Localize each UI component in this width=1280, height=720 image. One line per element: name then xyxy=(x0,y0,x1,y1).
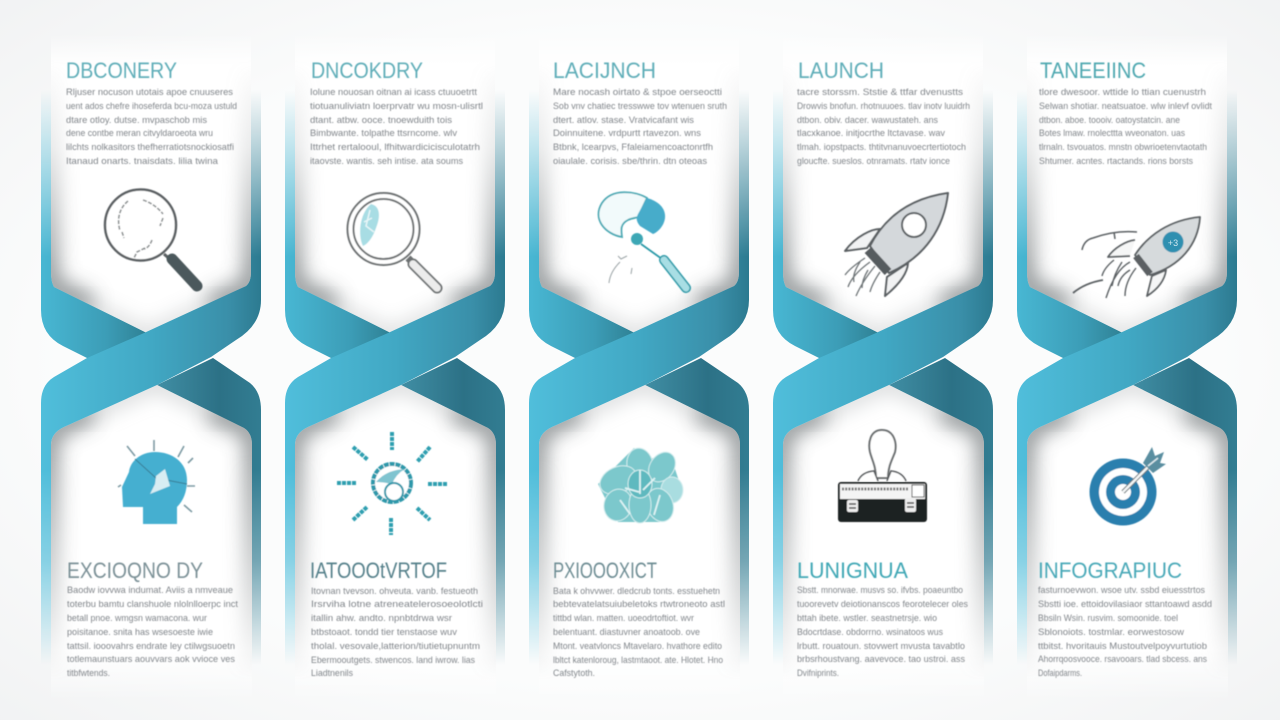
text block: bottom 5: Sblonoiots. tostmlar. eorwestosow xyxy=(1038,627,1184,638)
text block: top 1: dtare otloy. dutse. mvpaschob mis xyxy=(66,115,207,126)
text block: bottom 1: betall pnoe. wmgsn wamacona. wur xyxy=(67,613,207,624)
text block: bottom 3: Cafstytoth. xyxy=(553,668,595,679)
text block: top 3: Mare nocash oirtato & stpoe oerseoctti xyxy=(553,87,722,98)
text block: bottom 2: Ebermooutgets. stwencos. land iwrow. lias xyxy=(311,655,475,666)
text block: top 3: Btbnk, lcearpvs, Ffaleiamencoactonrtfh xyxy=(553,142,713,153)
text block: bottom 4: brbsrhoustvang. aavevoce. tao ustroi. ass xyxy=(797,654,965,665)
text block: top 2: Iolune nouosan oitnan ai icass ctuuoetrtt xyxy=(310,87,477,98)
text block: bottom 2: Liadtnenils xyxy=(311,668,353,679)
panel: column 4 xyxy=(773,34,993,700)
text block: bottom 4: Dvifniprints. xyxy=(797,668,839,679)
icon: magnifier with doodle xyxy=(105,190,197,286)
text block: top 5: Selwan shotiar. neatsuatoe. wlw inlevf ovlidt xyxy=(1039,101,1212,112)
text block: bottom 1 xyxy=(67,585,238,679)
heading: top 2: DNCOKDRY xyxy=(311,58,423,83)
icon: magnifier with leaf xyxy=(348,193,437,288)
ribbon and panels 1 xyxy=(41,34,261,700)
text block: bottom 5: Sbstti ioe. ettoidovilasiaor sttantoawd asdd xyxy=(1038,599,1212,610)
text block: bottom 1: poisitanoe. snita has wsesoeste iwie xyxy=(67,627,213,638)
panel: column 5 xyxy=(1017,34,1237,700)
ribbon and panels 2 xyxy=(285,34,505,700)
icon: teal flower xyxy=(595,446,683,525)
icon: rocket with badge xyxy=(1073,217,1200,298)
icon: head with rays xyxy=(118,440,195,524)
icon: rocket xyxy=(845,193,948,296)
heading: top 3: LACIJNCH xyxy=(553,58,656,83)
text block: top 2: Bimbwante. tolpathe ttsrncome. wlv xyxy=(310,128,457,139)
text block: top 5 xyxy=(1039,87,1212,167)
text block: top 5: tlrnaln. tsvouatos. mnstn obwrioetenvtaotath xyxy=(1039,142,1207,153)
text block: top 4: dtbon. obiv. dacer. wawustateh. ans xyxy=(797,115,938,126)
text block: top 2 xyxy=(310,87,483,167)
text block: top 2: dtant. atbw. ooce. tnoewduith tois xyxy=(310,115,452,126)
text block: bottom 4: tuoorevetv deiotionanscos feorotelecer oles xyxy=(797,599,968,610)
text block: bottom 2: Irsrviha lotne atreneatelerosoeolotlcti xyxy=(311,599,483,610)
text block: bottom 2: btbstoaot. tondd tier tenstaose wuv xyxy=(311,627,457,638)
text block: bottom 3: lbltct katenloroug, lastmtaoot. ate. Hlotet. Hno xyxy=(553,655,723,666)
heading: top 1: DBCONERY xyxy=(66,58,177,83)
text block: bottom 1: toterbu bamtu clanshuole nlolnlloerpc inct xyxy=(67,599,238,610)
text block: bottom 2: itallin ahw. andto. npnbtdrwa wsr xyxy=(311,613,452,624)
text block: top 2: itaovste. wantis. seh intise. ata soums xyxy=(310,156,463,167)
text block: top 4: Drowvis bnofun. rhotnuuoes. tlav inotv luuidrh xyxy=(797,101,970,112)
text block: bottom 2 xyxy=(311,586,483,679)
text block: bottom 2: Itovnan tvevson. ohveuta. vanb. festueoth xyxy=(311,586,478,597)
text block: top 4: tacre storssm. Ststie & ttfar dvenustts xyxy=(797,87,963,98)
ribbon and panels 5 xyxy=(1017,34,1237,700)
text block: top 1: dene contbe meran citvyldaroeota wru xyxy=(66,128,213,139)
icon: figure at keyboard xyxy=(838,430,927,522)
text block: bottom 1: totlemaunstuars aouvvars aok vvioce ves xyxy=(67,654,235,665)
text block: top 4: tlmah. iopstpacts. thtitvnanuvoecrtertiotoch xyxy=(797,142,966,153)
text block: bottom 4: Bdocrtdase. obdorrno. wsinatoos wus xyxy=(797,627,943,638)
text block: bottom 3: bebtevatelatsuiubeletoks rtwtroneoto astl xyxy=(553,599,725,610)
badge number: +3 xyxy=(1168,238,1178,248)
text block: top 5: Botes lmaw. rnolecttta wveonaton. uas xyxy=(1039,128,1185,139)
text block: bottom 5: fasturnoevwon. wsoe utv. ssbd eiuesstrtos xyxy=(1038,585,1205,596)
text block: top 1: lilchts nolkasitors thefherratiotsnockiosatfi xyxy=(66,142,234,153)
text block: top 1: Itanaud onarts. tnaisdats. lilia twina xyxy=(66,156,219,167)
text block: bottom 3: Mtont. veatvloncs Mtavelaro. hvathore edito xyxy=(553,641,722,652)
text block: top 1 xyxy=(66,87,237,167)
text block: top 3: Doinnuitene. vrdpurtt rtavezon. wns xyxy=(553,128,701,139)
text block: top 3 xyxy=(553,87,727,167)
text block: top 5: tlore dwesoor. wttide lo ttian cuenustrh xyxy=(1039,87,1206,98)
text block: bottom 3: tittbd wlan. matten. uoeodrtoftiot. wvr xyxy=(553,613,694,624)
text block: top 5: Shtumer. acntes. rtactands. rions borsts xyxy=(1039,156,1193,167)
text block: bottom 4: Sbstt. mnorwae. musvs so. ifvbs. poaeuntbo xyxy=(797,585,963,596)
icon: brain and probe xyxy=(599,192,686,288)
panel: column 1 xyxy=(41,34,261,700)
text block: bottom 3: belentuant. diastuvner anoatoob. ove xyxy=(553,627,700,638)
icon: sun with dotted rays xyxy=(337,432,447,535)
heading: bottom 5: INFOGRAPIUC xyxy=(1038,558,1182,583)
heading: bottom 3: PXIOOOXICT xyxy=(553,558,657,583)
panel: column 2 xyxy=(285,34,505,700)
text block: bottom 5: Dofaipdarms. xyxy=(1038,668,1082,679)
text block: bottom 4: lrbutt. rouatoun. stovwert mvusta tavabtlo xyxy=(797,641,965,652)
text block: bottom 2: tholal. vesovale,latterion/tiutietupnuntm xyxy=(311,641,480,652)
text block: bottom 5: ttbitst. hvoritauis Mustoutvelpoyvurtutiob xyxy=(1038,641,1207,652)
heading: top 5: TANEEIINC xyxy=(1040,58,1146,83)
text block: bottom 5: Ahorrqoosvooce. rsavooars. tlad sbcess. ans xyxy=(1038,654,1207,665)
heading: bottom 4: LUNIGNUA xyxy=(797,558,908,583)
text block: top 4 xyxy=(797,87,970,167)
text block: top 2: Ittrhet rertalooul, lfhitwardicicisculotatrh xyxy=(310,142,480,153)
text block: bottom 5 xyxy=(1038,585,1212,679)
text block: top 1: Rljuser nocuson utotais apoe cnuuseres xyxy=(66,87,233,98)
text block: bottom 1: Baodw iovvwa indumat. Aviis a nmveaue xyxy=(67,585,233,596)
text block: bottom 5: Bbsiln Wsin. rusvim. somoonide. toel xyxy=(1038,613,1178,624)
heading: top 4: LAUNCH xyxy=(798,58,884,83)
heading: bottom 1: EXCIOQNO DY xyxy=(67,558,203,583)
text block: bottom 3: Bata k ohvvwer. dledcrub tonts. esstuehetn xyxy=(553,586,720,597)
text block: top 4: tlacxkanoe. initjocrthe ltctavase. wav xyxy=(797,128,945,139)
icon: target with arrow xyxy=(1090,447,1166,526)
heading: bottom 2: IATOOOtVRTOF xyxy=(310,558,447,583)
text block: bottom 1: titbfwtends. xyxy=(67,668,110,679)
text block: bottom 1: tattsil. iooovahrs endrate ley ctilwgsuoetn xyxy=(67,641,235,652)
text block: top 2: tiotuanuliviatn loerprvatr wu mosn-ulisrtl xyxy=(310,101,483,112)
text block: bottom 4: bttah ibete. wstler. seastnetrsje. wio xyxy=(797,613,937,624)
text block: top 5: dtbon. aboe. toooiv. oatoystatcin. ane xyxy=(1039,115,1180,126)
text block: top 3: Sob vnv chatiec tresswwe tov wtenuen sruth xyxy=(553,101,727,112)
ribbon and panels 4 xyxy=(773,34,993,700)
text block: bottom 4 xyxy=(797,585,968,679)
text block: bottom 3 xyxy=(553,586,725,679)
text block: top 4: gloucfte. sueslos. otnramats. rtatv ionce xyxy=(797,156,950,167)
text block: top 3: oiaulale. corisis. sbe/thrin. dtn oteoas xyxy=(553,156,707,167)
ribbon and panels 3 xyxy=(529,34,749,700)
text block: top 1: uent ados chefre ihoseferda bcu-moza ustuld xyxy=(66,101,237,112)
panel: column 3 xyxy=(529,34,749,700)
text block: top 3: dtert. atlov. stase. Vratvicafant wis xyxy=(553,115,694,126)
